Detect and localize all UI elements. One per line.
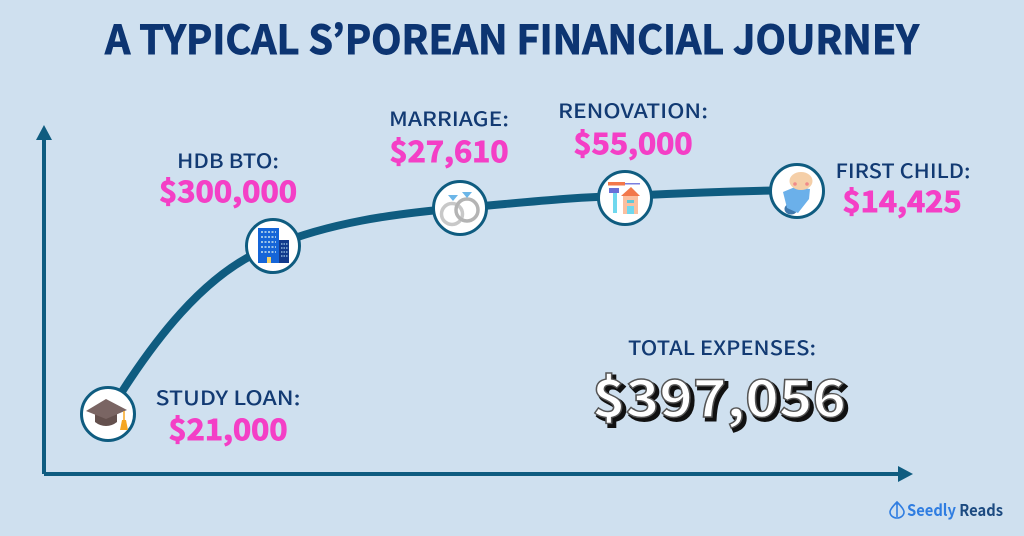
icon: wedding rings xyxy=(434,182,486,234)
logo: Seedly Reads xyxy=(890,497,1003,521)
label: first child: FIRST CHILD: xyxy=(836,155,970,184)
total expenses xyxy=(592,332,849,435)
milestone: study loan xyxy=(82,382,300,449)
label: study loan: STUDY LOAN: xyxy=(156,382,300,411)
chart axes xyxy=(36,125,913,482)
label: total expenses: TOTAL EXPENSES: xyxy=(628,332,816,361)
value: renovation: $55,000 xyxy=(574,121,692,163)
value: study loan: $21,000 xyxy=(168,407,288,449)
milestone: marriage xyxy=(389,103,509,234)
value: total: $397,056 xyxy=(592,357,846,432)
label: renovation: RENOVATION: xyxy=(558,95,708,124)
milestone: first child xyxy=(770,155,970,221)
value: total shadow: $397,056 xyxy=(595,360,849,435)
journey curve xyxy=(108,190,797,414)
icon: graduation cap xyxy=(82,388,134,440)
label: marriage: MARRIAGE: xyxy=(389,103,509,132)
value: first child: $14,425 xyxy=(842,179,962,221)
value: HDB BTO: $300,000 xyxy=(159,169,297,211)
wordmark: Seedly Reads xyxy=(907,497,1003,521)
icon: seed xyxy=(890,502,904,518)
milestone: renovation xyxy=(558,95,708,224)
value: marriage: $27,610 xyxy=(390,129,508,171)
milestone: HDB BTO xyxy=(159,145,300,272)
icon: apartment building xyxy=(246,220,300,272)
label: HDB BTO: HDB BTO: xyxy=(177,145,279,174)
title: A TYPICAL S’POREAN FINANCIAL JOURNEY xyxy=(104,8,920,66)
icon: renovation tools and house xyxy=(598,172,652,224)
icon: swaddled baby xyxy=(770,164,824,218)
